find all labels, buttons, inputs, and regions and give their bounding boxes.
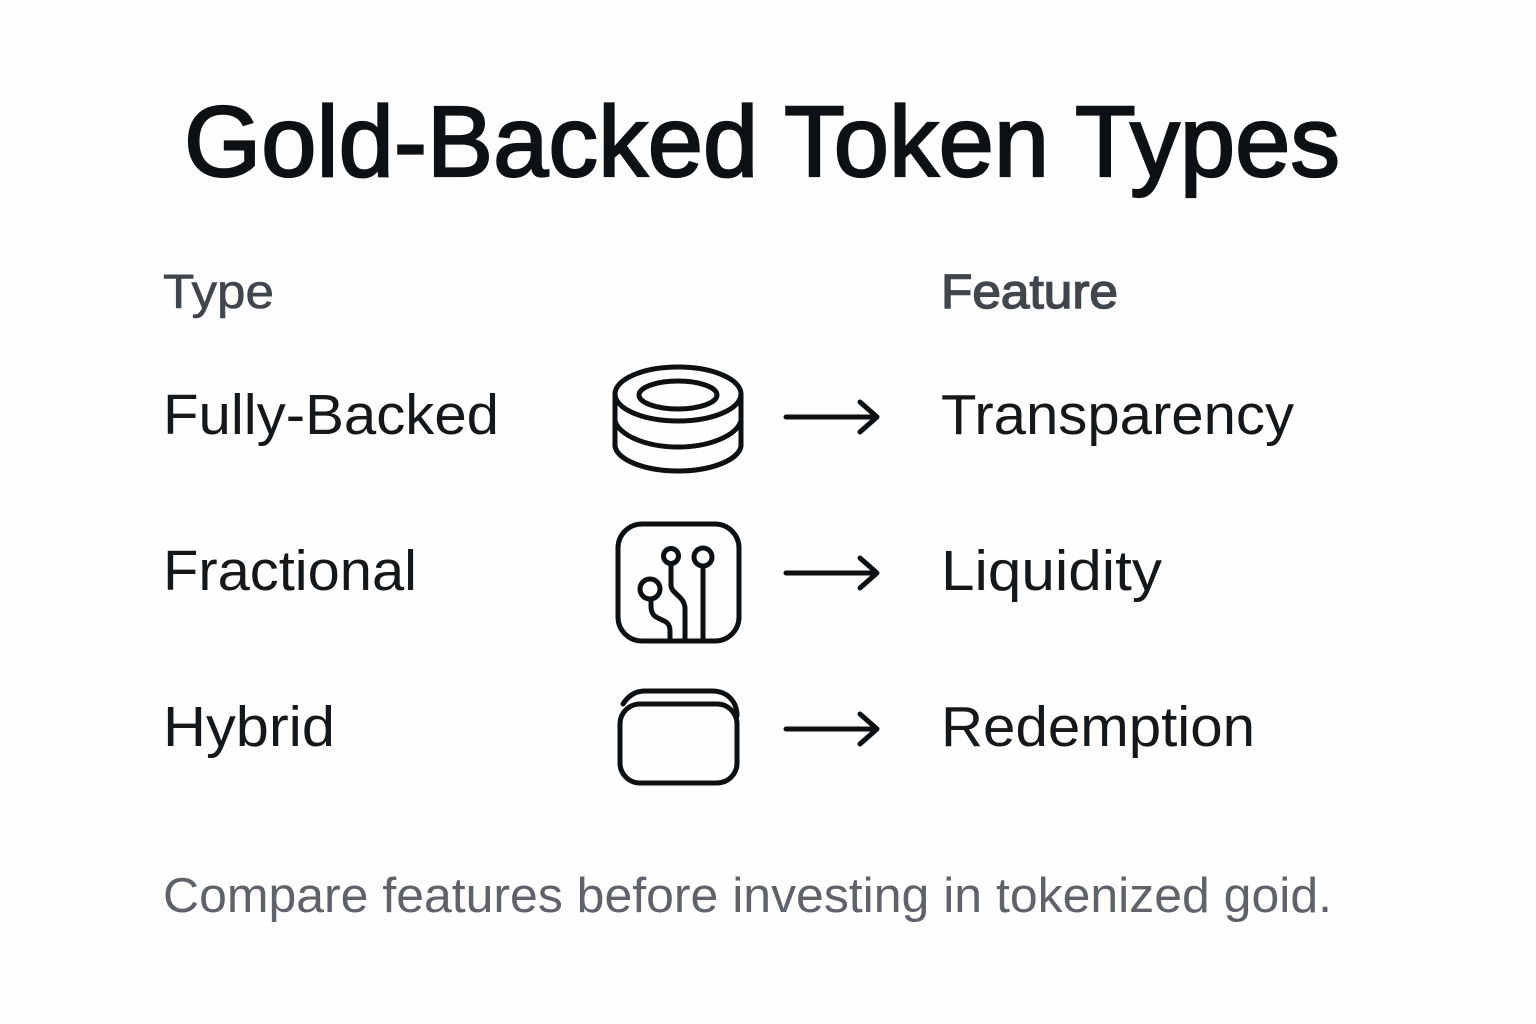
icon: circuit chip [618, 524, 739, 641]
title: Gold-Backed Token Types [184, 86, 1340, 198]
icon: wallet card [620, 691, 737, 783]
row 2 type: Fractional: Fractional [163, 539, 417, 603]
row 1 type: Fully-Backed: Fully-Backed [163, 383, 499, 447]
row 1 feature: Transparency: Transparency [941, 383, 1295, 447]
arrow: Fractional to Liquidity [786, 558, 877, 588]
column heading: Type: Type [163, 266, 274, 319]
icon: stacked coin [615, 367, 741, 471]
row 3 type: Hybrid: Hybrid [163, 695, 335, 759]
arrow: Fully-Backed to Transparency [786, 402, 877, 432]
row 2 feature: Liquidity: Liquidity [941, 539, 1163, 603]
footer note: Compare features before investing in tokenized goid. [163, 869, 1332, 923]
column heading: Feature: Feature [941, 266, 1118, 319]
row 3 feature: Redemption: Redemption [941, 695, 1255, 759]
arrow: Hybrid to Redemption [786, 714, 877, 744]
